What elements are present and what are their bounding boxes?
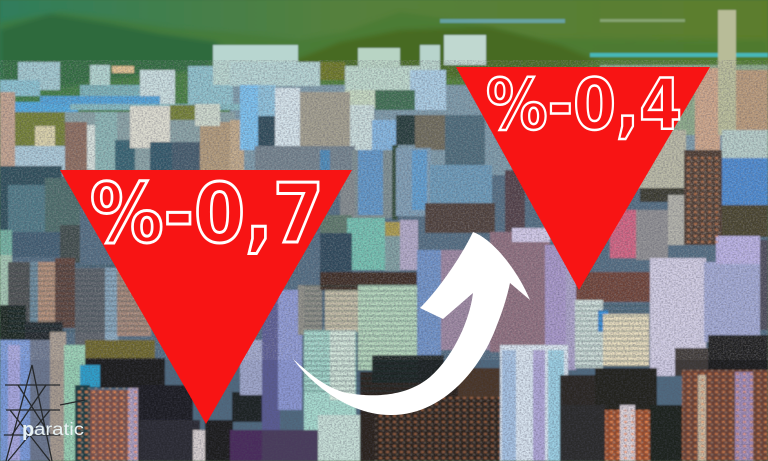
- centre blue-tan towers: [230, 62, 495, 281]
- distant hills: [0, 12, 768, 130]
- triangle: left red down marker: [60, 170, 352, 424]
- upper-left far city: [0, 35, 486, 146]
- logo: paratic: p: [22, 419, 34, 441]
- distant lights: [440, 19, 565, 23]
- value: right triangle percentage: %-0,4: [486, 64, 682, 146]
- value: left triangle percentage: %-0,7: [90, 167, 324, 262]
- icon: transmission tower: [4, 365, 85, 461]
- arrow: curved white upward arrow: [293, 232, 530, 415]
- triangle: right red down marker: [456, 67, 710, 290]
- right-side buildings: [500, 10, 768, 461]
- centre lower buildings: [262, 232, 550, 461]
- logo: paratic: aratic: [34, 419, 84, 439]
- logo: paratic: [22, 419, 84, 441]
- window textures: [78, 388, 138, 461]
- lower-left buildings: [0, 255, 264, 461]
- mid-left buildings: [0, 92, 230, 300]
